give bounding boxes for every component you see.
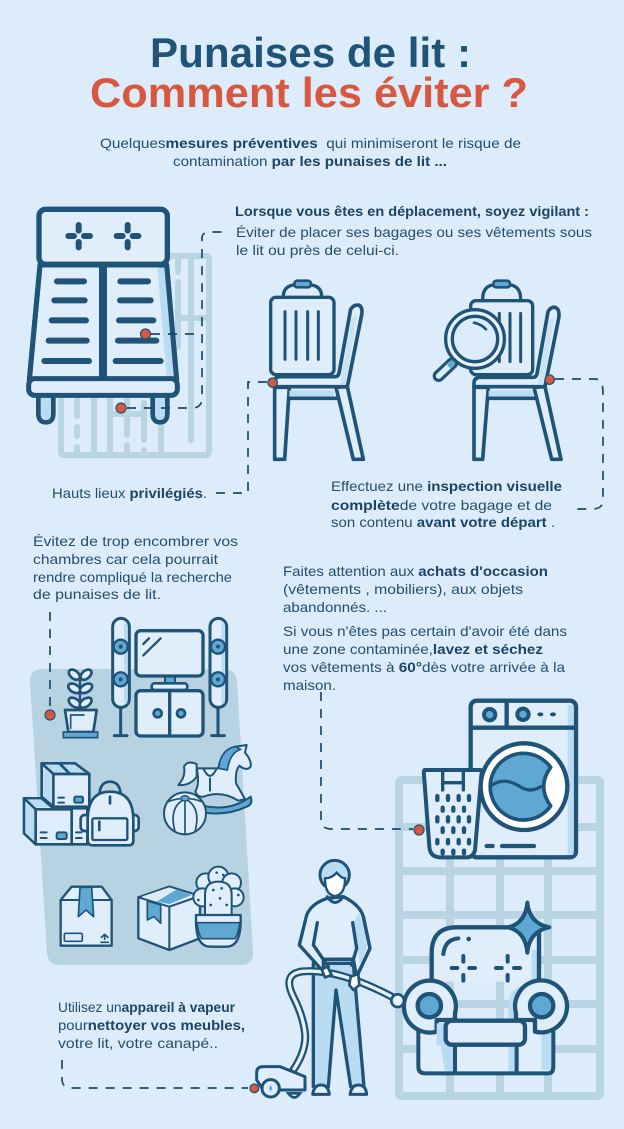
magnifying glass [439, 310, 507, 376]
intro text: contamination par les punaises de lit ... [173, 153, 447, 169]
text: vapeur: pournettoyer vos meubles, [58, 1017, 245, 1033]
armrests [508, 985, 533, 1020]
connector: vacuum [62, 1060, 248, 1088]
text: vapeur [58, 999, 245, 1051]
television [136, 631, 203, 690]
seat and back [474, 307, 559, 387]
text: encombrer [33, 533, 238, 602]
connector: inspection [555, 379, 603, 509]
parcel [61, 887, 112, 946]
rocking horse [178, 745, 251, 814]
text: inspection [331, 478, 562, 530]
suitcase [483, 285, 521, 299]
vacuum [288, 1093, 300, 1097]
text: achats d'occasion [283, 563, 567, 693]
text: inspection: complète de votre bagage et de [331, 497, 552, 513]
icon: washing machine [424, 701, 576, 857]
decorative window behind bed [61, 256, 209, 455]
bed legs [38, 393, 167, 422]
text: hauts lieux: Hauts lieux privilégiés . [52, 485, 207, 501]
text: encombrer: rendre compliqué la recherche [33, 569, 232, 585]
intro text [100, 135, 521, 169]
right speaker [210, 618, 227, 736]
plant [63, 668, 98, 738]
icon: armchair [404, 903, 567, 1073]
text: achats d'occasion: une zone contaminée, lavez et séchez [283, 641, 543, 657]
basket [424, 770, 482, 857]
chair lower [418, 1032, 553, 1073]
icon: suitcase on chair [268, 281, 363, 459]
text: déplacement [235, 203, 592, 258]
head [327, 897, 343, 902]
bed frame [29, 265, 177, 380]
ball [164, 792, 206, 834]
hose [289, 971, 397, 1070]
connector: clutter [45, 612, 55, 720]
door [481, 743, 567, 830]
chair legs [474, 387, 488, 459]
title: Comment les éviter ? [90, 69, 528, 116]
connector: bed to text [116, 232, 224, 413]
chair back [432, 927, 539, 982]
icon: bed [29, 209, 177, 422]
panel: clutter background [30, 669, 253, 965]
text: achats d'occasion: Si vous n'êtes pas certain d'avoir été dans [283, 623, 567, 639]
red dot [268, 378, 277, 387]
text: encombrer: Évitez de trop encombrer vos [33, 533, 238, 549]
cactus [193, 867, 244, 947]
intro text: Quelques mesures préventives qui minimiseront le risque de [100, 135, 521, 151]
illustration: man with vacuum [250, 860, 404, 1097]
stacked boxes [24, 763, 89, 844]
text: achats d'occasion: Faites attention aux achats d'occasion [283, 563, 548, 579]
backpack [81, 782, 139, 845]
hands [322, 967, 332, 977]
text: vapeur: votre lit, votre canapé.. [58, 1035, 218, 1051]
cabinet [136, 691, 203, 736]
text: déplacement: Éviter de placer ses bagages ou ses vêtements sous [236, 224, 592, 240]
title: Punaises de lit : [150, 29, 471, 76]
text: achats d'occasion: (vêtements , mobiliers), aux objets [283, 581, 523, 597]
seat and back [274, 305, 362, 387]
decorative window behind furniture [399, 780, 600, 1096]
base [29, 379, 177, 395]
connector: chair to hauts lieux [214, 382, 267, 493]
title [90, 29, 528, 116]
sparkle [508, 903, 549, 953]
torso [299, 897, 370, 977]
cushion [446, 1021, 525, 1045]
text: achats d'occasion: abandonnés. ... [283, 599, 387, 615]
text: inspection: Effectuez une inspection visuelle [331, 478, 562, 494]
text: déplacement: Lorsque vous êtes en déplacement, soyez vigilant : [235, 203, 589, 219]
headboard [39, 209, 167, 264]
text: déplacement: le lit ou près de celui-ci. [236, 242, 399, 258]
chair legs [275, 387, 289, 459]
machine body [471, 701, 576, 857]
text: encombrer: de punaises de lit. [33, 586, 161, 602]
text: achats d'occasion: vos vêtements à 60°dès votre arrivée à la [283, 659, 565, 675]
text: encombrer: chambres car cela pourrait [33, 551, 218, 567]
trousers [313, 963, 364, 1087]
text: vapeur: Utilisez unappareil à vapeur [58, 999, 236, 1015]
mattress slats [44, 225, 161, 377]
icon: suitcase inspection [439, 281, 561, 459]
illustration: cluttered room [24, 618, 251, 950]
left speaker [113, 618, 129, 736]
suitcase [283, 285, 322, 297]
connector: washing machine [321, 692, 424, 835]
red dot [545, 375, 554, 384]
text: achats d'occasion: maison. [283, 677, 336, 693]
text: inspection: son contenu avant votre départ . [331, 514, 555, 530]
open box [138, 887, 200, 950]
